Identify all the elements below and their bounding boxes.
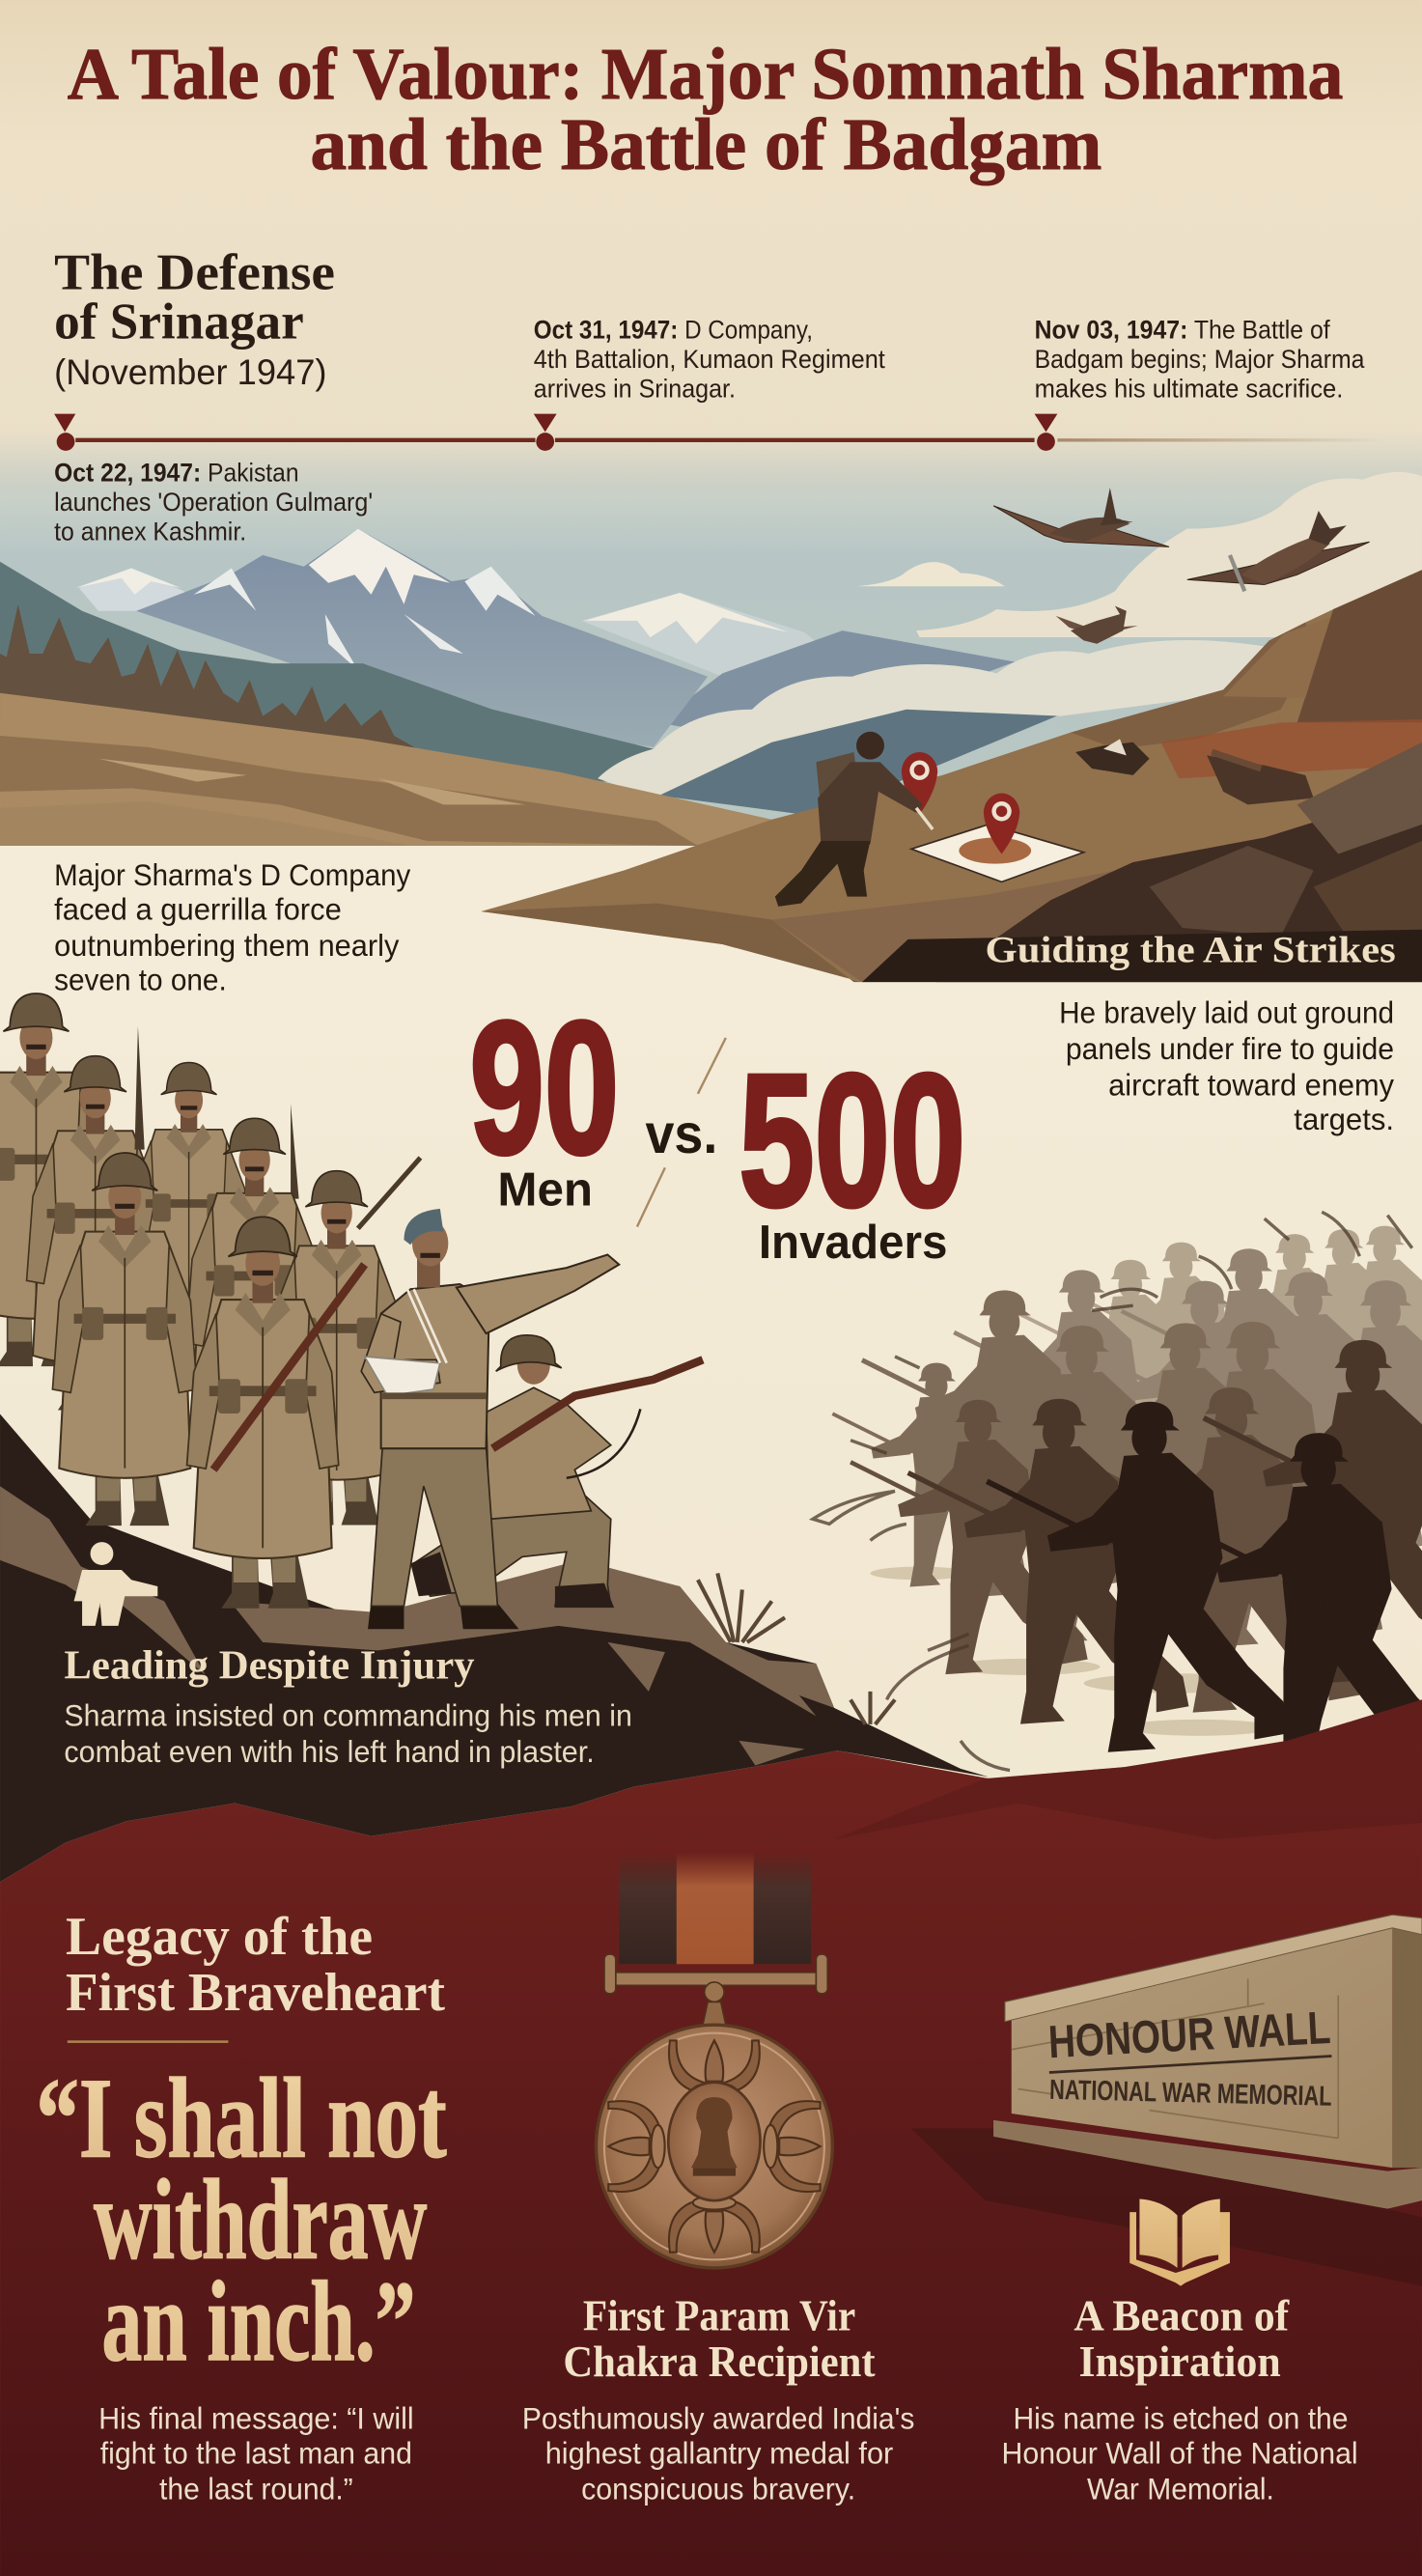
tan hills [0, 693, 771, 846]
plane 2 [1187, 511, 1370, 591]
text: honour wall description: His name is etched on the [1013, 2402, 1348, 2436]
timeline text: Nov 03: Badgam begins; Major Sharma [1035, 345, 1365, 374]
text: D Company outnumbered: outnumbering them nearly [54, 929, 400, 963]
illustration: invaders charging [813, 1212, 1422, 1783]
text: D Company outnumbered [54, 858, 410, 997]
rear ranks [1019, 1226, 1422, 1498]
title: A Tale of Valour: Major Somnath Sharma [68, 33, 1343, 115]
text: injury description [64, 1699, 632, 1769]
text: injury description: Sharma insisted on commanding his men in [64, 1699, 632, 1733]
heading: The Defense of Srinagar: of Srinagar [54, 294, 304, 350]
heading: A Beacon of Inspiration: A Beacon of [1073, 2291, 1290, 2340]
quote: I shall not withdraw an inch: an inch.” [101, 2257, 415, 2385]
quote: I shall not withdraw an inch [36, 2054, 447, 2385]
timeline text: Oct 22 [54, 458, 373, 546]
text: air strikes description [1059, 996, 1394, 1136]
text: air strikes description: panels under fire to guide [1066, 1032, 1394, 1066]
front ranks [987, 1402, 1422, 1783]
ground shadows [870, 1567, 1412, 1772]
timeline text: Oct 31: Oct 31, 1947: D Company, [534, 315, 813, 344]
dark rock mass [0, 1414, 989, 1882]
timeline text: Nov 03: Nov 03, 1947: The Battle of [1035, 315, 1330, 344]
heading: Legacy of the First Braveheart: First Braveheart [66, 1963, 445, 2023]
timeline [54, 414, 1386, 451]
text: D Company outnumbered: faced a guerrilla force [54, 892, 342, 926]
back rank soldiers [0, 994, 420, 1609]
heading: Legacy of the First Braveheart: Legacy of the [66, 1907, 373, 1967]
text: D Company outnumbered: Major Sharma's D Company [54, 858, 410, 892]
heading: First Param Vir Chakra Recipient [563, 2291, 876, 2386]
marker: Oct 22 [54, 414, 75, 451]
timeline text: Oct 31: 4th Battalion, Kumaon Regiment [534, 345, 885, 374]
statistic: 90 Men vs 500 Invaders: 90 [469, 983, 619, 1193]
title [68, 33, 1343, 185]
text: final message: fight to the last man and [100, 2436, 412, 2470]
cloud bank: upper right [916, 472, 1422, 637]
title: and the Battle of Badgam [310, 103, 1101, 185]
timeline text: Oct 31: arrives in Srinagar. [534, 375, 736, 404]
red earth legacy panel [0, 1699, 1422, 2576]
inscription [1047, 2002, 1332, 2113]
small cloud [857, 562, 1005, 586]
wall face [1012, 1928, 1392, 2168]
statistic: 90 Men vs 500 Invaders: vs. [645, 1104, 717, 1165]
distant snow peaks [75, 569, 853, 677]
heading: First Param Vir Chakra Recipient: First Param Vir [583, 2291, 855, 2340]
red ridge shading [834, 1699, 1422, 1839]
foreground rock ridge [481, 570, 1422, 982]
heading: First Param Vir Chakra Recipient: Chakra Recipient [563, 2337, 876, 2386]
timeline text: Oct 22: Oct 22, 1947: Pakistan [54, 458, 299, 487]
statistic: 90 Men vs 500 Invaders [469, 983, 965, 1269]
text: honour wall description [1002, 2402, 1358, 2506]
wrecked targets [1075, 739, 1314, 804]
text: D Company outnumbered: seven to one. [54, 964, 227, 997]
marker: Nov 03 [1035, 414, 1057, 451]
text: medal description: Posthumously awarded India's [522, 2402, 914, 2436]
icon: injured officer [74, 1542, 157, 1626]
ribbon [619, 1853, 811, 1964]
dark rocks lower right [936, 742, 1422, 982]
text: medal description: highest gallantry medal for [545, 2436, 893, 2470]
text: air strikes description: aircraft toward enemy [1108, 1068, 1394, 1102]
heading: A Beacon of Inspiration [1073, 2291, 1290, 2386]
timeline text: Oct 31 [534, 315, 885, 404]
tree line [0, 604, 417, 749]
timeline text: Nov 03: makes his ultimate sacrifice. [1035, 375, 1343, 404]
background: parchment and lower battlefield paper [0, 0, 1422, 1856]
Major Sharma commanding figure [361, 1209, 619, 1629]
text: air strikes description: targets. [1294, 1103, 1394, 1136]
medal disc [596, 2025, 832, 2268]
statistic: 90 Men vs 500 Invaders: Men [497, 1162, 593, 1216]
quote: I shall not withdraw an inch: withdraw [94, 2156, 427, 2283]
heading: A Beacon of Inspiration: Inspiration [1078, 2337, 1281, 2386]
figure: Sharma laying panels [775, 732, 933, 907]
timeline text: Oct 22: to annex Kashmir. [54, 518, 246, 546]
text: final message: the last round.” [159, 2473, 353, 2506]
dark cliff with indian soldiers [0, 994, 989, 1882]
text: medal description [522, 2402, 914, 2506]
scene: Kashmir valley landscape [0, 431, 1422, 982]
grass tufts [698, 1573, 895, 1724]
heading: Leading Despite Injury: Leading Despite Injury [64, 1642, 475, 1688]
text: air strikes description: He bravely laid out ground [1059, 996, 1394, 1030]
main snow-capped mountain [136, 529, 708, 747]
timeline text: Nov 03 [1035, 315, 1365, 404]
text: final message: His final message: “I will [98, 2402, 414, 2436]
quote: I shall not withdraw an inch: “I shall not [36, 2054, 447, 2181]
top cap [1005, 1915, 1422, 2022]
statistic: 90 Men vs 500 Invaders: Invaders [759, 1216, 947, 1269]
state emblem [668, 2083, 761, 2200]
inscription: NATIONAL WAR MEMORIAL [1049, 2075, 1332, 2113]
text: injury description: combat even with his left hand in plaster. [64, 1735, 595, 1769]
heading: The Defense of Srinagar [54, 244, 335, 392]
cloud bank: valley [598, 640, 1269, 798]
plane 3 [1056, 606, 1138, 644]
marker: Oct 31 [534, 414, 557, 451]
banner: Guiding the Air Strikes: Guiding the Air Strikes [986, 930, 1396, 971]
heading: The Defense of Srinagar: (November 1947) [54, 351, 326, 392]
suspension bar [604, 1954, 827, 2030]
banner: Guiding the Air Strikes [862, 930, 1422, 982]
sunlit rock ledges [0, 1486, 834, 1765]
icon: open book [1129, 2198, 1230, 2286]
text: medal description: conspicuous bravery. [581, 2473, 855, 2506]
base [993, 2120, 1422, 2209]
heading: The Defense of Srinagar: The Defense [54, 244, 335, 300]
heading: Legacy of the First Braveheart [66, 1907, 445, 2043]
text: honour wall description: War Memorial. [1087, 2473, 1274, 2506]
teal foothills left [0, 562, 654, 782]
icon: Param Vir Chakra medal [596, 1853, 832, 2268]
middle ranks [850, 1387, 1361, 1713]
text: final message [98, 2402, 414, 2506]
vajra motifs [608, 2040, 821, 2253]
blue mountain range right [656, 630, 1015, 742]
honour wall monument [911, 1915, 1422, 2286]
plane 1 [993, 488, 1169, 546]
blue foreground mountain [654, 708, 1061, 816]
shadow [911, 2128, 1422, 2286]
stone joints [1012, 1979, 1338, 2139]
text: honour wall description: Honour Wall of the National [1002, 2436, 1358, 2470]
flying debris [813, 1212, 1412, 1771]
kneeling rifleman [410, 1335, 703, 1608]
statistic: 90 Men vs 500 Invaders: 500 [739, 1035, 965, 1246]
timeline text: Oct 22: launches 'Operation Gulmarg' [54, 488, 373, 517]
inscription: HONOUR WALL [1047, 2002, 1332, 2068]
ground panel and map pins [902, 752, 1084, 882]
